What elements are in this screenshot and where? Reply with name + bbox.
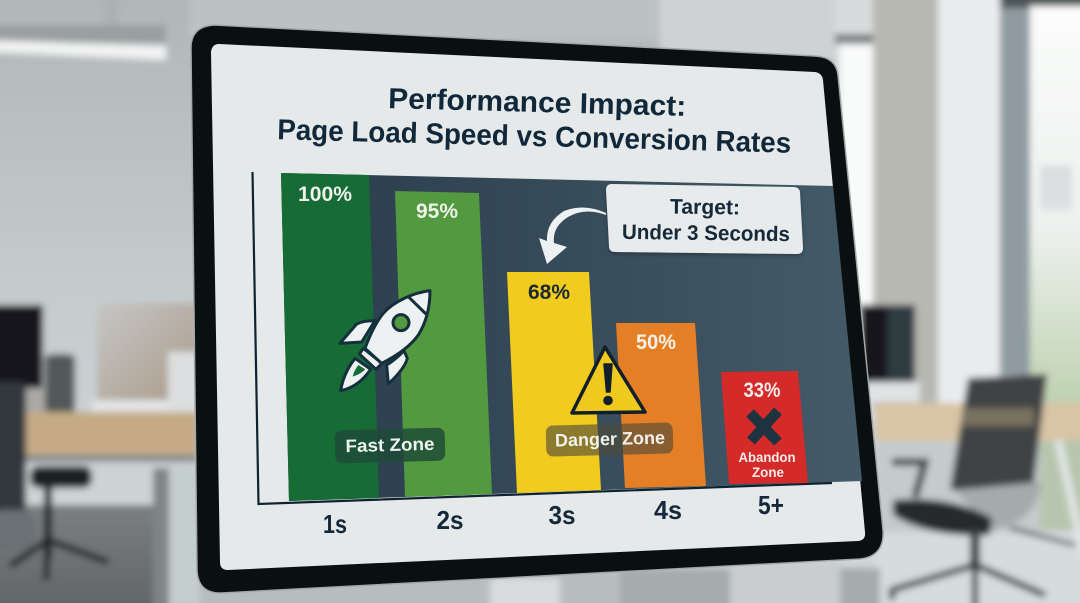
bar: 5+: [721, 371, 808, 484]
x axis labels: 2s: [436, 505, 464, 535]
chart title: [277, 83, 792, 160]
icon: x mark: [750, 411, 778, 442]
bar: 2s: [395, 191, 492, 497]
callout: target: Target:: [670, 196, 740, 219]
arrow: callout to 3s bar: [539, 207, 606, 264]
fast zone label: [335, 428, 445, 463]
fast zone label: Fast Zone: [345, 434, 435, 456]
chart title: Performance Impact:: [388, 83, 687, 123]
chart title: Page Load Speed vs Conversion Rates: [277, 114, 792, 160]
icon: rocket: [340, 291, 430, 391]
value: 50%: 50%: [636, 331, 676, 354]
x axis labels: [323, 490, 784, 539]
bar: 3s: [507, 272, 601, 493]
icon: warning triangle: [572, 347, 645, 413]
abandon zone label: [738, 449, 796, 480]
danger zone label: Danger Zone: [555, 428, 665, 450]
tablet screen: [211, 44, 865, 570]
chart panel background: [281, 173, 862, 501]
bar chart: [252, 172, 862, 504]
value: 33%: 33%: [744, 379, 781, 402]
callout: target: Under 3 Seconds: [622, 221, 790, 246]
danger zone label: [546, 422, 673, 457]
abandon zone label: Zone: [752, 464, 784, 480]
x axis labels: 1s: [323, 509, 347, 539]
value: 68%: 68%: [528, 281, 570, 304]
bar: 4s: [616, 323, 706, 488]
x axis labels: 3s: [548, 500, 576, 530]
x axis labels: 4s: [654, 495, 682, 525]
axes: [252, 172, 832, 504]
value: 100%: 100%: [298, 183, 352, 206]
value: 95%: 95%: [416, 200, 458, 223]
bar: 1s: [281, 173, 379, 501]
callout: target: [606, 184, 803, 254]
tablet frame: [191, 25, 883, 593]
x axis labels: 5+: [758, 490, 784, 520]
abandon zone label: Abandon: [738, 449, 796, 465]
